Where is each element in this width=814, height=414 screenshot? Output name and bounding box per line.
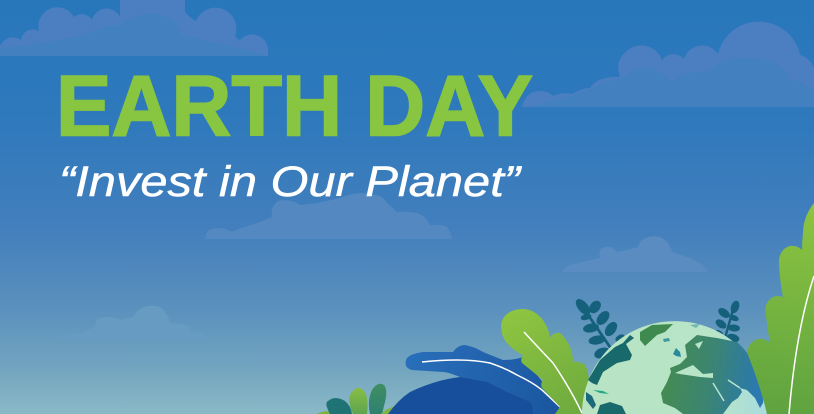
leaf vein (789, 276, 814, 414)
right large leaf (747, 203, 814, 414)
leaf vein (524, 332, 582, 413)
cloud: top right (522, 22, 814, 107)
cloud: middle (205, 193, 452, 239)
greenland (640, 324, 673, 346)
eurasia and africa (661, 335, 764, 414)
cloud: top left (0, 0, 268, 56)
red sea and gulf (713, 380, 740, 401)
small plant bottom left (317, 384, 402, 414)
caribbean islands (593, 390, 609, 394)
blue water globe (388, 345, 565, 414)
cloud: lower left (55, 306, 207, 340)
subtitle: “Invest in Our Planet” (59, 158, 522, 206)
title: EARTH DAY (56, 58, 533, 154)
earth globe (582, 321, 768, 414)
central america (586, 392, 596, 409)
left green leaf (501, 309, 590, 414)
cloud: right middle (562, 236, 708, 272)
left fern (573, 297, 626, 360)
svalbard (690, 324, 700, 328)
british isles (673, 348, 681, 357)
north america (588, 335, 634, 385)
iceland (663, 338, 670, 342)
white wave line (422, 360, 560, 407)
right fern (714, 300, 741, 344)
mediterranean (675, 365, 713, 378)
baltic detail (695, 341, 703, 349)
south america (597, 402, 626, 414)
